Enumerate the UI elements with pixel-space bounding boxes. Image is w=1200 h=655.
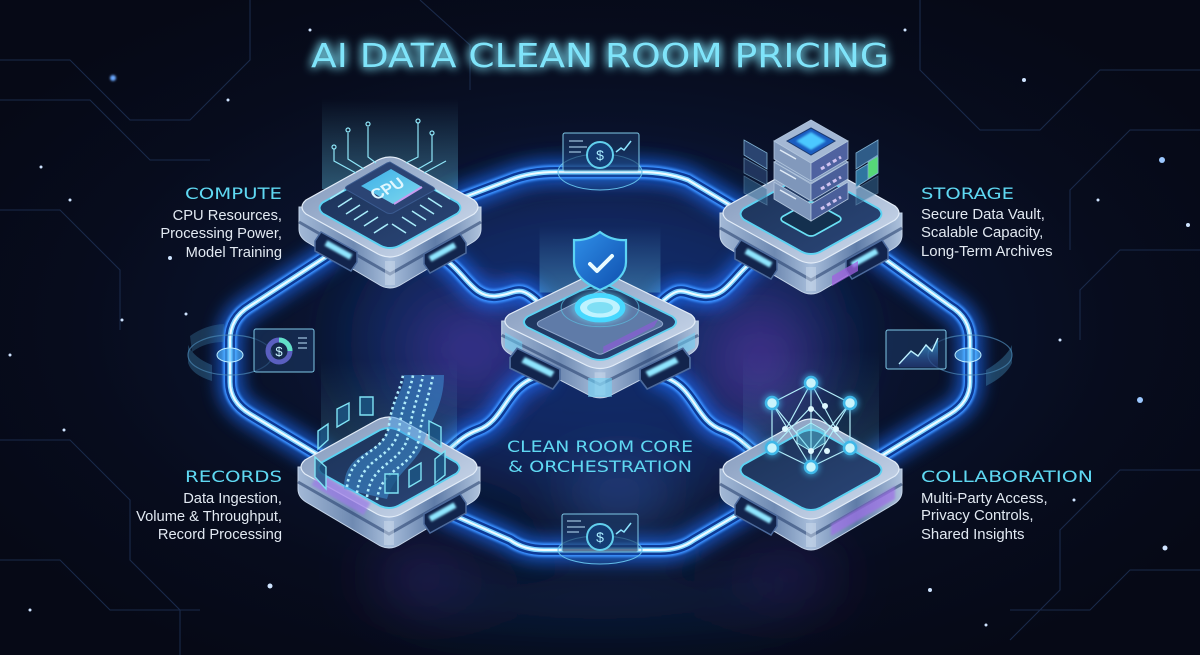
platform: storage [720, 120, 902, 294]
label: records: Record Processing [158, 527, 282, 543]
label: compute: Model Training [186, 245, 282, 261]
label: clean room core [507, 437, 693, 476]
icon: cpu chip: CPU [367, 175, 409, 204]
label: compute: CPU Resources, [173, 208, 282, 224]
label: storage [921, 184, 1053, 260]
mini card: bottom cost card [558, 514, 642, 564]
label: records: Data Ingestion, [183, 491, 282, 507]
label: records: Volume & Throughput, [136, 509, 282, 525]
mini card: left donut with swirl ring [188, 324, 314, 381]
label: storage: Long-Term Archives [921, 244, 1053, 260]
floor reflections [350, 180, 850, 624]
platform: records [298, 359, 480, 548]
label: storage: STORAGE [921, 184, 1014, 203]
mini card: top cost card [558, 133, 642, 190]
platform: clean room core [502, 226, 698, 398]
label: collaboration: Multi-Party Access, [921, 491, 1048, 507]
label: compute: Processing Power, [160, 226, 282, 242]
label: collaboration: Privacy Controls, [921, 508, 1034, 524]
label: records: RECORDS [185, 467, 282, 486]
connection wires [230, 172, 970, 550]
mini card: bottom cost card: $ [596, 529, 604, 545]
mini card: right chart with swirl ring [886, 330, 1012, 386]
label: records [136, 467, 282, 543]
label: collaboration: Shared Insights [921, 527, 1024, 543]
icon: network mesh [763, 374, 859, 476]
label: collaboration [921, 467, 1093, 543]
icon: cpu chip [330, 119, 450, 233]
label: clean room core: & ORCHESTRATION [508, 457, 692, 476]
mini card: top cost card: $ [596, 147, 604, 163]
mini card: left donut with swirl ring: $ [275, 344, 283, 359]
label: storage: Scalable Capacity, [921, 225, 1043, 241]
icon: glowing ring plate [537, 289, 663, 354]
label: compute: COMPUTE [185, 184, 282, 203]
platform: collaboration [720, 351, 902, 550]
platform: compute [299, 99, 481, 288]
icon: shield with check [574, 232, 626, 290]
icon: server stack [774, 120, 848, 221]
label: clean room core: CLEAN ROOM CORE [507, 437, 693, 456]
label: compute [160, 184, 282, 261]
label: storage: Secure Data Vault, [921, 207, 1045, 223]
label: collaboration: COLLABORATION [921, 467, 1093, 486]
title: AI DATA CLEAN ROOM PRICING [311, 36, 889, 75]
icon: side data panels [744, 140, 878, 205]
icon: data stream and documents [315, 375, 445, 500]
